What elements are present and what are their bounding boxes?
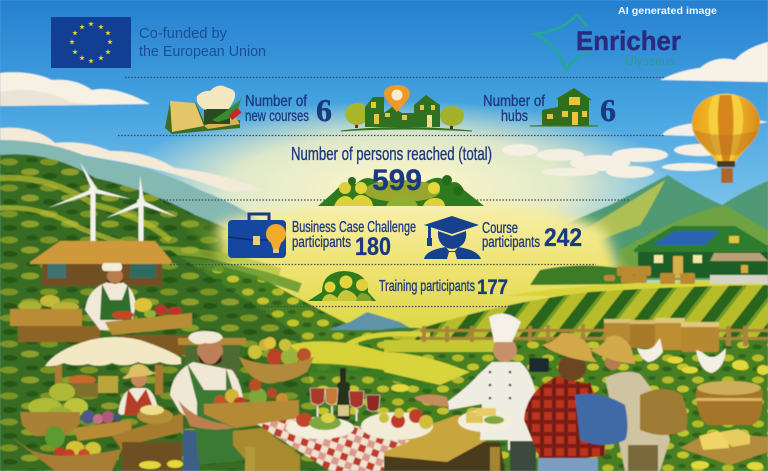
barrels xyxy=(604,318,719,352)
icon: crowd xyxy=(318,175,484,206)
icon: briefcase with light bulb xyxy=(228,214,286,258)
foreground meadow base xyxy=(0,330,768,471)
cheese on a board xyxy=(680,429,768,465)
Enricher Ulysseus logo: Enricher xyxy=(576,26,681,56)
label: number of new courses xyxy=(245,93,309,125)
chef xyxy=(415,313,536,471)
label: training participants: Training participants xyxy=(379,278,475,295)
label: business case challenge participants xyxy=(292,219,416,251)
photographer with backpack xyxy=(524,333,628,471)
Enricher Ulysseus logo xyxy=(535,14,681,70)
EU flag xyxy=(51,17,131,68)
market stall with umbrella xyxy=(45,337,246,397)
left foliage xyxy=(0,250,330,471)
value: 177: 177 xyxy=(477,276,508,299)
icon: graduate xyxy=(424,216,481,259)
icon: book with chef hat xyxy=(165,86,242,134)
label: number of hubs: Number of xyxy=(483,93,545,110)
stat: training participants xyxy=(308,271,508,301)
sky background xyxy=(0,0,768,300)
vineyard rows xyxy=(400,285,768,340)
Co-funded by the European Union text xyxy=(139,25,266,60)
stat: new courses xyxy=(165,86,332,134)
stat: course participants xyxy=(424,216,582,259)
value: 6 hubs: 6 xyxy=(600,92,616,128)
AI generated image note: AI generated image xyxy=(618,6,717,17)
wine bottle and glasses xyxy=(310,368,380,421)
left green hills xyxy=(0,154,290,340)
label: number of new courses: Number of xyxy=(245,93,307,110)
Enricher Ulysseus logo: Ulysseus xyxy=(625,53,675,68)
label: business case challenge participants: Business Case Challenge xyxy=(292,219,416,236)
label: number of hubs: hubs xyxy=(501,108,528,125)
foreground barrel xyxy=(696,381,763,425)
stat: persons reached xyxy=(291,144,492,206)
flowers scattered in meadow xyxy=(139,356,768,470)
farmhouse with solar panels xyxy=(634,226,768,284)
plates of food xyxy=(286,408,433,440)
vendor with crate xyxy=(85,263,192,355)
main vendor with crate xyxy=(170,331,299,471)
right mountains xyxy=(540,175,768,280)
cheese plate xyxy=(458,408,512,432)
label: number of hubs xyxy=(483,93,545,125)
label: course participants xyxy=(482,220,540,251)
label: number of new courses: new courses xyxy=(245,108,309,125)
left produce crates xyxy=(10,295,100,342)
background clouds and central glow xyxy=(0,42,768,270)
central meadow xyxy=(160,201,768,350)
produce baskets xyxy=(10,383,132,471)
wooden hut xyxy=(30,241,172,286)
chickens xyxy=(637,338,726,373)
label: number of persons reached: Number of persons reached (total) xyxy=(291,144,492,164)
Co-funded by the European Union text: the European Union xyxy=(139,43,266,60)
icon: training group xyxy=(308,271,376,301)
picnic table with checked cloth xyxy=(233,415,520,471)
value: 242: 242 xyxy=(544,224,582,252)
icon: village with location pin xyxy=(341,85,472,131)
Co-funded by the European Union text: Co-funded by xyxy=(139,25,227,42)
child vendor xyxy=(118,364,158,415)
stall counter xyxy=(112,405,183,471)
wooden fence xyxy=(420,324,768,346)
hot air balloon xyxy=(692,94,760,183)
label: business case challenge participants: participants xyxy=(292,234,351,251)
middle meadow bands xyxy=(285,334,500,385)
value: 180: 180 xyxy=(355,233,391,261)
value: 6 new courses: 6 xyxy=(316,92,332,128)
label: course participants: participants xyxy=(482,234,540,251)
dotted divider lines xyxy=(118,78,665,306)
value: 599: 599 xyxy=(372,164,422,197)
stat: hubs xyxy=(483,88,616,128)
distant blue hills xyxy=(0,140,270,240)
hay bales by the farmhouse xyxy=(604,266,695,284)
right fruit basket xyxy=(239,337,314,383)
second tourist with bag xyxy=(590,336,687,471)
stat: business case challenge xyxy=(228,214,416,261)
icon: hub house xyxy=(530,88,598,126)
label: course participants: Course xyxy=(482,220,518,237)
wind turbines xyxy=(48,162,177,244)
